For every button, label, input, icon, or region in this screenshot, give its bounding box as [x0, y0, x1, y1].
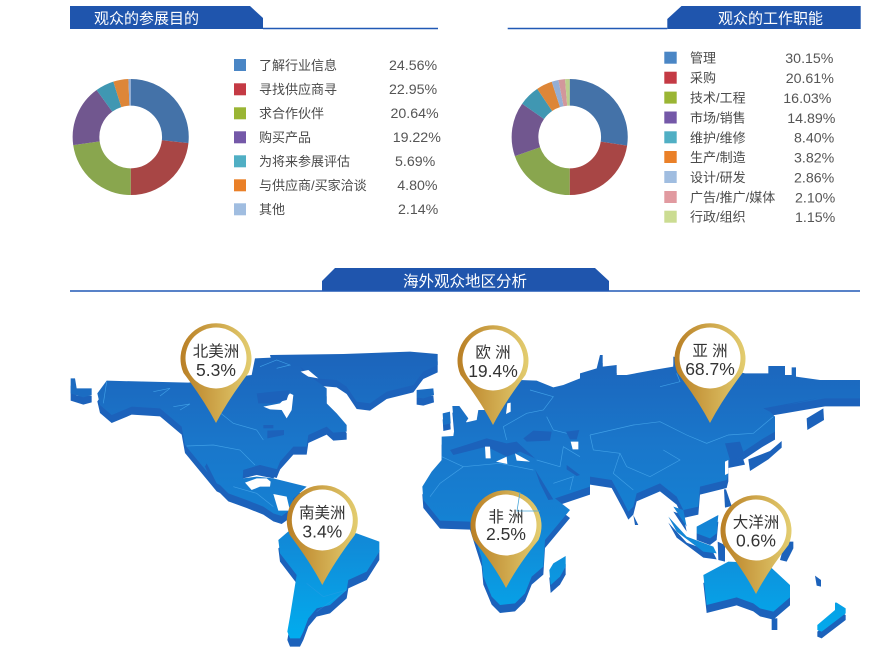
heading: visitor purpose [70, 6, 438, 29]
legend: visitor purpose: 为将来参展评估 [259, 154, 350, 169]
legend: job function: 2.10% [795, 190, 836, 206]
legend: job function: 20.61% [786, 71, 834, 87]
legend: job function: 16.03% [783, 91, 832, 107]
pin: South America: 3.4% [302, 522, 342, 542]
map: americas [71, 352, 438, 647]
legend: visitor purpose: 22.95% [389, 82, 438, 98]
pin: Oceania: 大洋洲 [733, 514, 779, 532]
legend: job function: 30.15% [785, 51, 834, 67]
pin: Europe: 19.4% [468, 361, 518, 381]
world map [71, 352, 860, 647]
map: europe asia africa oceania [422, 355, 860, 638]
legend: visitor purpose: 4.80% [397, 178, 438, 194]
legend: job function: 14.89% [787, 111, 836, 127]
legend: visitor purpose: 与供应商/买家洽谈 [259, 178, 367, 193]
pin: Europe [458, 325, 528, 425]
pin: Asia: 68.7% [685, 359, 735, 379]
pin: Africa: 非 洲 [488, 508, 524, 526]
pin: Europe: 欧 洲 [475, 344, 511, 362]
inland seas [450, 398, 817, 500]
legend: visitor purpose: 了解行业信息 [259, 58, 337, 73]
legend: job function: 8.40% [794, 130, 835, 146]
heading: job function: 观众的工作职能 [718, 10, 823, 28]
legend: job function: 维护/维修 [690, 130, 746, 145]
donut chart: job function [525, 92, 614, 182]
legend: job function: 技术/工程 [690, 91, 746, 106]
pin: South America: 南美洲 [299, 504, 346, 522]
legend: visitor purpose: 24.56% [389, 58, 438, 74]
legend: job function: 设计/研发 [690, 170, 746, 185]
legend: job function: 市场/销售 [690, 110, 746, 126]
legend: job function: 2.86% [794, 170, 835, 186]
pin: Asia: 亚 洲 [692, 343, 728, 360]
panel: visitor purpose [70, 6, 441, 218]
pin: North America: 北美洲 [193, 342, 239, 360]
legend: job function: 生产/制造 [690, 150, 746, 165]
legend: visitor purpose [234, 58, 441, 218]
legend: visitor purpose: 2.14% [398, 202, 439, 218]
panel: job function [508, 6, 861, 226]
legend: visitor purpose: 其他 [259, 202, 285, 217]
legend: visitor purpose: 20.64% [390, 106, 439, 122]
pin: South America [287, 485, 358, 585]
donut chart: visitor purpose [86, 92, 175, 182]
pin: Oceania: 0.6% [736, 530, 776, 550]
legend: visitor purpose: 19.22% [393, 130, 441, 146]
pin: Africa [470, 490, 542, 588]
heading: job function [508, 6, 861, 29]
pin: North America [180, 323, 252, 423]
pin: Oceania [721, 495, 792, 594]
legend: visitor purpose: 寻找供应商寻 [259, 82, 337, 97]
legend: visitor purpose: 求合作伙伴 [259, 106, 324, 121]
pin: North America: 5.3% [196, 360, 236, 380]
legend: job function: 广告/推广/媒体 [690, 190, 775, 205]
pin: Asia [674, 323, 745, 423]
heading: overseas visitor regions: 海外观众地区分析 [403, 272, 527, 290]
heading: visitor purpose: 观众的参展目的 [94, 10, 199, 28]
legend: job function: 1.15% [795, 210, 836, 226]
legend: job function [664, 51, 836, 226]
legend: job function: 采购 [690, 71, 716, 86]
legend: job function: 3.82% [794, 150, 835, 166]
legend: job function: 行政/组织 [690, 210, 746, 225]
pin: Africa: 2.5% [486, 524, 526, 544]
legend: job function: 管理 [690, 51, 716, 66]
legend: visitor purpose: 5.69% [395, 154, 436, 170]
heading: overseas visitor regions [70, 268, 860, 291]
legend: visitor purpose: 购买产品 [259, 130, 311, 145]
